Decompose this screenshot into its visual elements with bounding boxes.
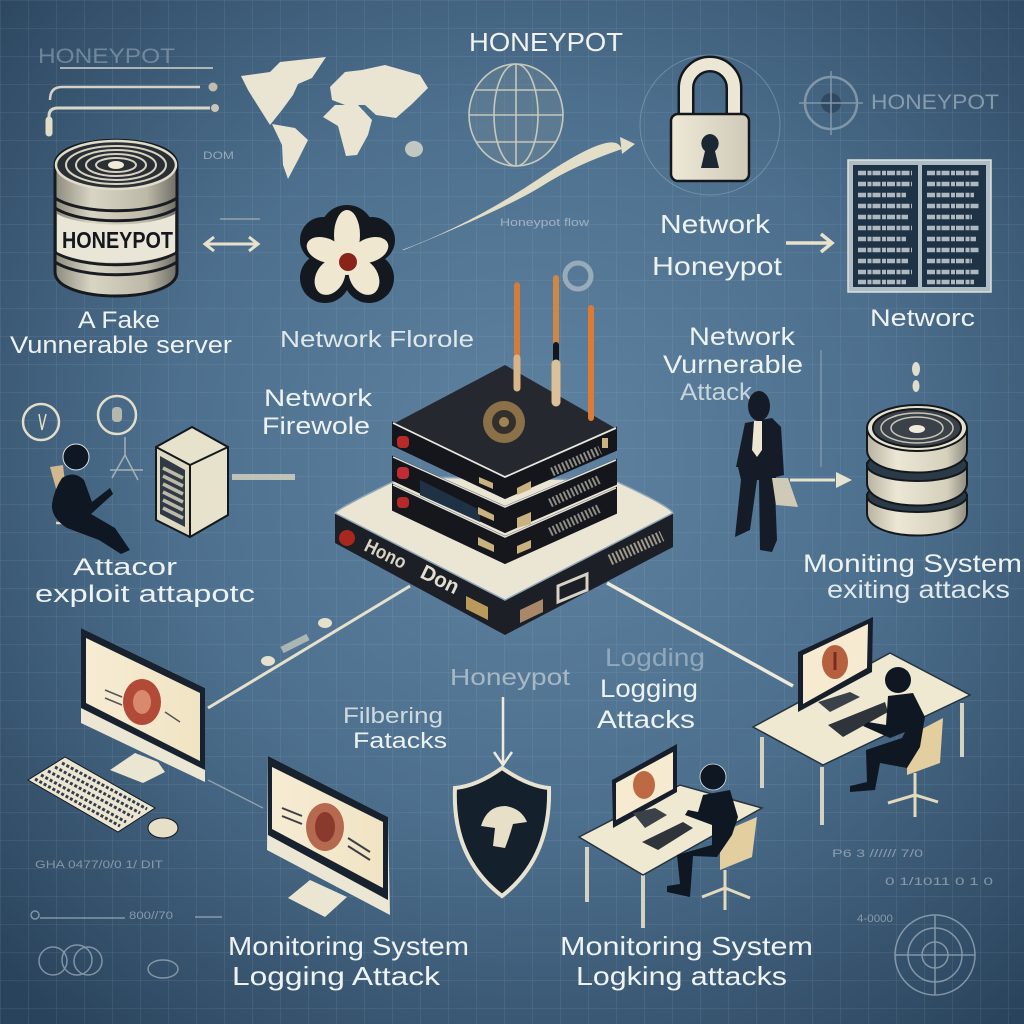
caption: network honeypot: Network — [660, 209, 771, 239]
icon: faded radar — [895, 915, 975, 995]
decorative blur line — [220, 218, 260, 220]
small faded text: P6 3 ////// 7/0 — [832, 848, 923, 860]
icon: honeypot server cylinder: HONEYPOT — [62, 227, 173, 253]
icon: world map — [241, 57, 428, 179]
arrow: faint vertical — [820, 350, 822, 467]
icon: padlock — [640, 55, 780, 195]
small faded text — [35, 150, 993, 925]
caption: network vulnerable attack: Vurnerable — [663, 351, 803, 379]
caption: monitoring system left — [228, 931, 469, 991]
caption: attacor — [35, 554, 255, 608]
icon: standing attacker — [735, 391, 798, 552]
icon: right desk workstation — [753, 617, 970, 825]
caption: network vulnerable attack: Attack — [680, 379, 753, 406]
caption: monitoring system exiting attacks — [803, 550, 1022, 604]
caption: a fake vulnerable server: Vunnerable server — [10, 332, 232, 359]
arrow: attacker to database — [790, 472, 852, 488]
icon: flower — [300, 205, 395, 303]
caption: small blurred text: Honeypot flow — [500, 217, 589, 229]
connector: left monitor to lower monitor — [208, 780, 263, 808]
caption: logging attacks: Logding — [605, 644, 705, 672]
router bottom layer — [393, 485, 616, 563]
router middle layer — [393, 457, 616, 532]
caption: filtering fatacks: Fatacks — [353, 728, 447, 753]
caption: attacor: exploit attapotc — [35, 581, 255, 608]
icon: shield — [455, 768, 549, 896]
icon: lower computer — [267, 756, 390, 917]
icon: faded marks bottom left — [31, 911, 222, 978]
caption: network vulnerable attack: Network — [689, 323, 796, 351]
icon: globe — [469, 64, 563, 166]
caption: network honeypot — [652, 209, 783, 281]
arrow: flower to padlock — [402, 137, 635, 250]
icon: left computer — [28, 628, 205, 838]
caption: network vulnerable attack — [663, 323, 803, 406]
small faded text: 4-0000 — [857, 913, 893, 925]
caption: monitoring system exiting attacks: exiting attacks — [827, 576, 1010, 604]
caption: monitoring system right: Monitoring System — [560, 931, 813, 961]
icon: target honeypot logo top right — [799, 71, 999, 135]
caption: monitoring system left: Logging Attack — [232, 961, 441, 991]
router base: Don — [417, 561, 463, 599]
caption: filtering fatacks — [343, 703, 447, 753]
arrow: honeypot to log — [786, 234, 832, 252]
arrow: router to right desk — [607, 583, 793, 686]
router antennas — [517, 278, 591, 418]
small faded text: DOM — [203, 150, 234, 162]
caption: logging attacks — [597, 644, 705, 734]
caption: attacor: Attacor — [73, 554, 177, 581]
icon: database stack — [867, 405, 967, 536]
caption: a fake vulnerable server — [10, 307, 232, 359]
icon: seated attacker with server — [23, 396, 295, 554]
caption: a fake vulnerable server: A Fake — [78, 307, 160, 334]
arrow: server to flower — [205, 237, 258, 251]
caption: network firewole: Network — [264, 385, 373, 412]
small faded text: GHA 0477/0/0 1/ DIT — [35, 859, 163, 871]
small faded text: 800//70 — [129, 910, 173, 922]
router base — [335, 477, 673, 635]
caption: network: Networc — [870, 305, 975, 332]
icon: target honeypot logo top right: HONEYPOT — [871, 91, 999, 114]
icon: faded honeypot legend top left: HONEYPOT — [38, 45, 175, 68]
caption: network honeypot: Honeypot — [652, 251, 783, 281]
icon: log document — [848, 160, 991, 292]
arrow: honeypot down — [494, 697, 512, 765]
caption: network firewole — [262, 385, 373, 440]
caption: monitoring system exiting attacks: Moniting System — [803, 550, 1022, 578]
arrow: router to left monitor — [208, 586, 410, 708]
small faded text: 0 1/1011 0 1 0 — [885, 876, 993, 888]
caption: logging attacks: Logging — [600, 675, 698, 703]
icon: faded honeypot legend top left — [38, 45, 219, 133]
icon: faint ring above router — [565, 263, 591, 289]
caption: logging attacks: Attacks — [597, 706, 695, 734]
caption: network firewole: Firewole — [262, 413, 370, 440]
router base: Hono — [361, 536, 410, 574]
caption: monitoring system right — [560, 931, 813, 991]
icon: honeypot server cylinder — [55, 140, 177, 296]
arrow: database up — [912, 362, 920, 392]
caption: faded honeypot: Honeypot — [450, 664, 571, 690]
icon: lower desk workstation — [579, 744, 762, 928]
caption: monitoring system left: Monitoring System — [228, 931, 469, 961]
caption: monitoring system right: Logking attacks — [576, 961, 787, 991]
caption: network florole: Network Florole — [280, 326, 474, 352]
caption: filtering fatacks: Filbering — [343, 703, 443, 728]
title: HONEYPOT — [469, 27, 623, 57]
icon: router — [335, 278, 673, 635]
router top layer — [393, 365, 616, 498]
